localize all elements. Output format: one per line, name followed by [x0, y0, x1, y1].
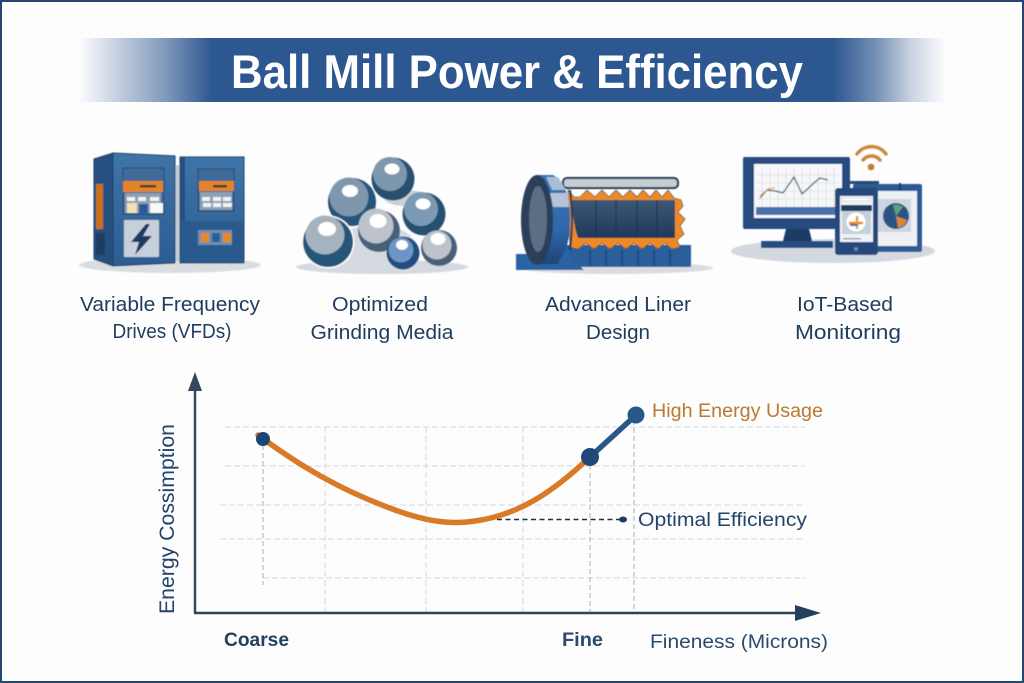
y axis with arrow: [188, 372, 202, 613]
label: advanced liner: Advanced Liner: [545, 294, 691, 316]
drum end band: [536, 175, 570, 264]
label: monitoring: Monitoring: [795, 322, 901, 344]
callout line: optimal efficiency: [497, 516, 627, 522]
title banner: [78, 38, 946, 102]
line chart: energy vs fineness: [156, 372, 828, 653]
label: drives: Drives (VFDs): [112, 321, 232, 343]
icon: variable frequency drives: [79, 153, 261, 273]
high usage segment: [590, 415, 636, 457]
drum interior: [572, 200, 675, 238]
point: high energy: [628, 406, 644, 424]
label: iot-based: IoT-Based: [797, 294, 893, 316]
label: grinding media: Grinding Media: [310, 322, 454, 344]
label: fine: Fine: [562, 630, 603, 651]
label: design: Design: [586, 322, 650, 344]
y axis label: Energy Cossimption: [156, 424, 179, 614]
point: coarse: [256, 432, 270, 446]
blue base with ribs: [560, 245, 691, 267]
icon: wifi symbol: [857, 147, 886, 170]
label: optimized: Optimized: [332, 294, 428, 316]
orange liner teeth: [568, 190, 685, 249]
label: optimal efficiency: Optimal Efficiency: [638, 510, 808, 531]
feature labels: [80, 294, 901, 344]
label: variable frequency drives: Variable Frequency: [80, 294, 260, 316]
x axis with arrow: [194, 605, 821, 621]
label: fineness: Fineness (Microns): [650, 632, 828, 653]
icon: mill liner: [516, 175, 713, 274]
curve: [258, 435, 590, 523]
label: coarse: Coarse: [224, 630, 289, 651]
title banner: Ball Mill Power & Efficiency: [231, 45, 803, 98]
icon: grinding media balls: [296, 157, 468, 274]
point: fine: [581, 448, 599, 466]
pedestal: [516, 245, 584, 270]
icon: IoT monitoring devices: [731, 147, 935, 263]
label: high energy usage: High Energy Usage: [652, 401, 823, 422]
